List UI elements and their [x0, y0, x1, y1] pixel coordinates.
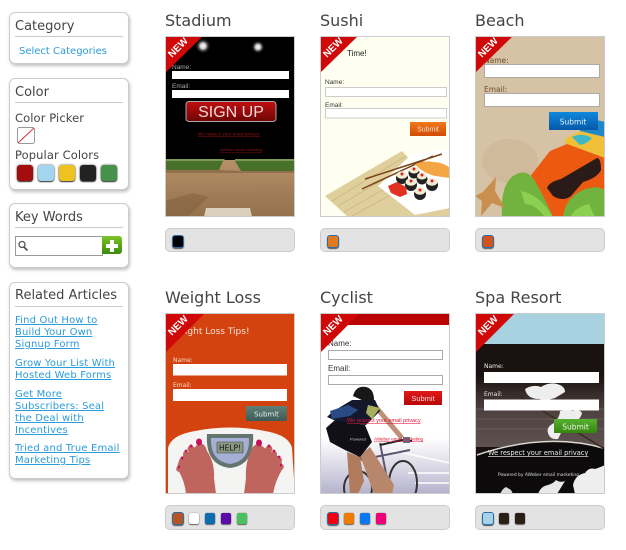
template: spa resort: NEW	[476, 313, 501, 338]
template: cyclist: We respect your email privacy	[347, 418, 421, 424]
heading: related articles: Related Articles	[15, 288, 117, 303]
swatch: white	[189, 513, 199, 524]
swatch: light blue	[483, 513, 493, 524]
swatch: dark brown 2	[515, 513, 525, 524]
template: cyclist: Powered	[350, 436, 366, 442]
template: stadium: Name:	[172, 64, 191, 71]
swatch: yellow	[59, 165, 75, 181]
heading: spa resort: Spa Resort	[475, 288, 561, 307]
label: color picker: Color Picker	[15, 111, 84, 125]
label: popular colors: Popular Colors	[15, 148, 99, 162]
swatch: dark red	[17, 165, 33, 181]
heading: key words	[15, 204, 123, 228]
swatch: green	[101, 165, 117, 181]
article link: grow your list	[15, 358, 116, 381]
template: cyclist: AWeber email marketing	[374, 436, 424, 442]
icon: green add button	[102, 236, 122, 254]
swatch: red	[328, 513, 338, 524]
swatch: purple	[221, 513, 231, 524]
article link: find out how: Signup Form	[15, 339, 80, 350]
search input	[15, 236, 103, 256]
template: spa resort: Name:	[484, 363, 504, 370]
template: cyclist: Name:	[328, 339, 352, 348]
template: cyclist: Submit	[411, 394, 436, 403]
article link: tried and true: Tried and True Email	[15, 443, 120, 454]
template: stadium: We respect your email privacy	[198, 132, 260, 136]
template: spa resort: Powered by AWeber email marketing	[498, 472, 579, 478]
template: stadium: NEW	[166, 36, 191, 60]
swatch: magenta	[376, 513, 386, 524]
color bar: weight loss	[165, 505, 295, 530]
icon: color picker empty swatch	[17, 127, 35, 144]
template: weight loss: NEW	[166, 313, 191, 338]
swatch: black	[80, 165, 96, 181]
template: stadium: AWeber email marketing	[220, 147, 262, 152]
article link: grow your list: Hosted Web Forms	[15, 370, 111, 381]
template: spa resort: Email:	[484, 391, 503, 398]
template: weight loss	[165, 313, 295, 494]
template: stadium: SIGN UP	[198, 104, 264, 121]
swatch: rust	[173, 513, 183, 524]
template: stadium	[165, 36, 295, 217]
template: weight loss: Submit	[254, 410, 279, 418]
article link: get more subscribers: Subscribers: Seal	[15, 401, 104, 412]
swatch: black	[173, 236, 183, 247]
link: select categories: Select Categories	[19, 46, 107, 57]
color bar: cyclist	[320, 505, 450, 530]
template: beach: Name:	[484, 56, 509, 65]
swatch: orange	[328, 236, 338, 247]
template: sushi: Email:	[325, 102, 343, 109]
search box	[15, 236, 122, 256]
swatch: orange	[344, 513, 354, 524]
template: stadium: Email:	[172, 83, 190, 90]
article link: get more subscribers	[15, 389, 104, 436]
article link: grow your list: Grow Your List With	[15, 358, 115, 369]
heading: cyclist: Cyclist	[320, 288, 373, 307]
swatch: dark brown 1	[499, 513, 509, 524]
template: beach: Submit	[560, 118, 586, 126]
color bar: stadium	[165, 228, 295, 252]
panel: category	[9, 12, 129, 64]
template: weight loss: Weight Loss Tips!	[171, 327, 250, 337]
template: spa resort	[475, 313, 605, 494]
template: beach: Email:	[484, 85, 507, 94]
article link: find out how	[15, 315, 98, 350]
template: cyclist	[320, 313, 450, 494]
color bar: spa resort	[475, 505, 605, 530]
template: sushi: Submit	[417, 126, 439, 134]
article link: find out how: Build Your Own	[15, 327, 92, 338]
article link: find out how: Find Out How to	[15, 315, 97, 326]
template: weight loss: HELP!	[219, 444, 241, 452]
heading: color: Color	[15, 85, 49, 100]
swatch: burnt orange	[483, 236, 493, 247]
template: sushi: Time!	[347, 49, 367, 58]
color bar: beach	[475, 228, 605, 252]
swatch: blue	[360, 513, 370, 524]
article link: get more subscribers: Get More	[15, 389, 62, 400]
panel: key words	[9, 203, 129, 268]
template: beach: NEW	[476, 36, 501, 60]
heading: color	[15, 79, 123, 103]
article link: get more subscribers: the Deal with	[15, 413, 84, 424]
template: weight loss: Email:	[173, 382, 192, 389]
color bar: sushi	[320, 228, 450, 252]
template: weight loss: Name:	[173, 357, 193, 364]
article link: tried and true	[14, 443, 120, 466]
article link: get more subscribers: Incentives	[15, 425, 68, 436]
panel: color	[9, 78, 129, 190]
heading: category	[15, 13, 123, 37]
template: spa resort: Submit	[562, 422, 589, 432]
template: sushi: Name:	[325, 79, 344, 86]
template: sushi	[320, 36, 450, 217]
template: spa resort: We respect your email privacy	[488, 449, 588, 457]
swatch: green	[237, 513, 247, 524]
swatch: blue	[205, 513, 215, 524]
template: beach	[475, 36, 605, 217]
template: cyclist: NEW	[321, 313, 346, 338]
heading: sushi: Sushi	[320, 11, 363, 30]
heading: key words: Key Words	[15, 210, 83, 225]
heading: stadium: Stadium	[165, 11, 232, 30]
popular color swatches	[15, 163, 119, 183]
template: cyclist: Email:	[328, 364, 350, 373]
swatch: light blue	[38, 165, 54, 181]
template: sushi: NEW	[321, 36, 346, 60]
heading: weight loss: Weight Loss	[165, 288, 261, 307]
icon: magnifier	[18, 240, 28, 252]
heading: category: Category	[15, 19, 74, 34]
panel: related articles	[9, 282, 129, 479]
heading: related articles	[15, 283, 123, 307]
article link: tried and true: Marketing Tips	[15, 455, 90, 466]
heading: beach: Beach	[475, 11, 525, 30]
